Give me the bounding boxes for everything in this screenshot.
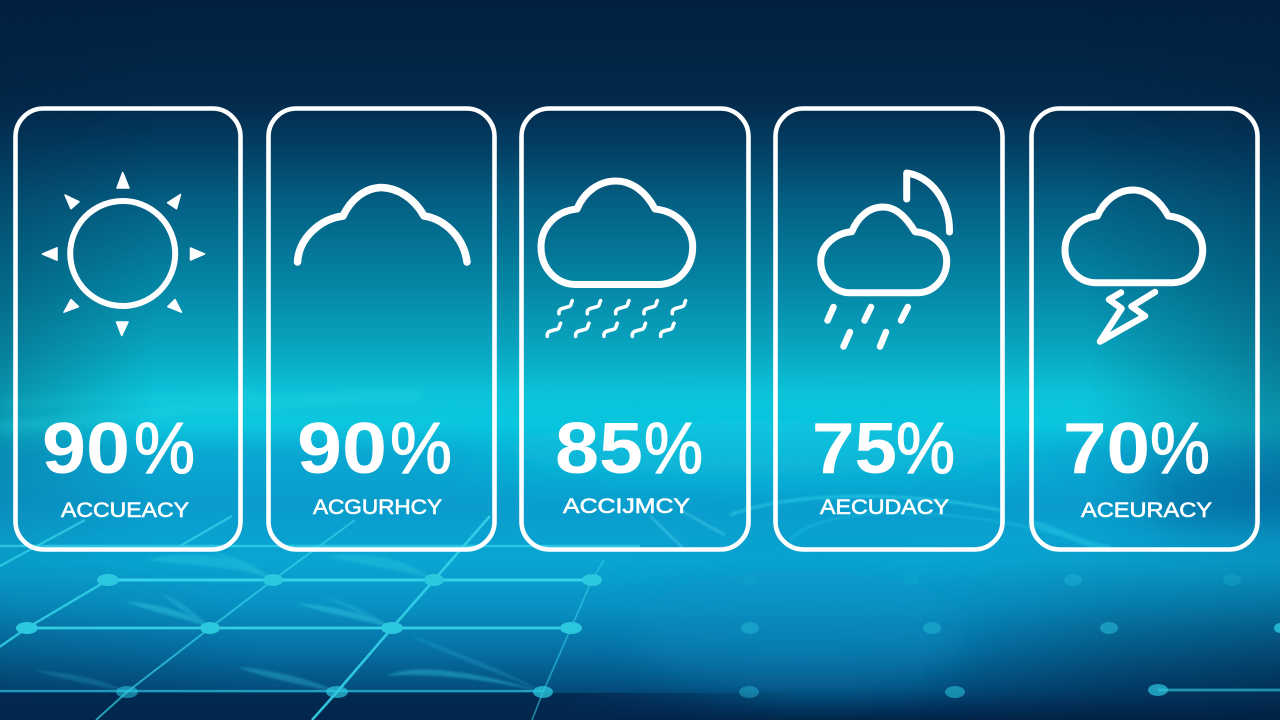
icon: sun <box>42 172 204 336</box>
panel: cloudy <box>268 108 494 550</box>
value: 70%: 70 <box>1063 409 1150 489</box>
icon: cloud with drizzle <box>541 181 693 336</box>
icon: open cloud <box>298 188 467 262</box>
value: 85%: 85 <box>555 409 643 489</box>
icon: cloud with moon and rain <box>821 173 950 346</box>
value: 90%: 90 <box>42 409 130 489</box>
label: ACEURACY <box>1081 499 1212 522</box>
value: 90%: % <box>390 409 452 489</box>
label: AECUDACY <box>820 496 949 519</box>
value: 75%: % <box>896 409 955 489</box>
value: 75%: 75 <box>812 409 897 489</box>
value: 70%: % <box>1150 409 1210 489</box>
icon: cloud with lightning <box>1065 190 1203 342</box>
label: ACCIJMCY <box>563 495 690 518</box>
panel: night rain <box>776 108 1002 550</box>
value: 90%: 90 <box>297 409 387 489</box>
network grid <box>0 516 1280 720</box>
panel: drizzle <box>522 108 748 550</box>
panel: sunny <box>16 108 240 550</box>
value: 90%: % <box>134 409 195 489</box>
panel: thunderstorm <box>1032 108 1258 550</box>
label: ACGURHCY <box>313 496 442 519</box>
value: 85%: % <box>644 409 703 489</box>
label: ACCUEACY <box>61 499 189 522</box>
